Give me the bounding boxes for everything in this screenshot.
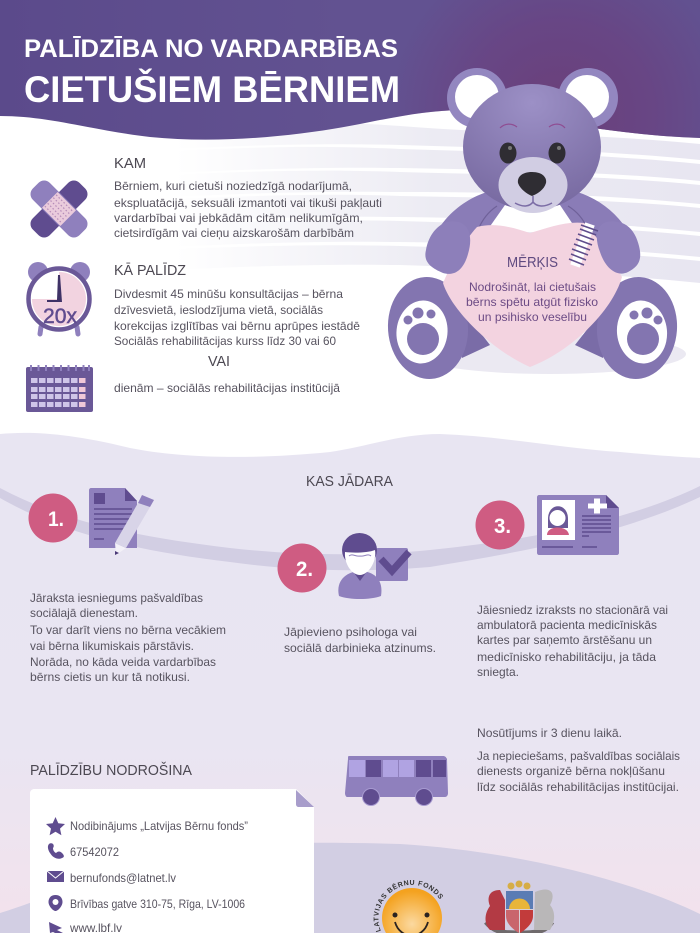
goal text on heart: bērns spētu atgūt fizisko (466, 295, 598, 309)
block: KĀ PALĪDZ: VAI (208, 354, 230, 370)
step 3 text: kartes par saņemto ārstēšanu un (477, 633, 652, 647)
heart (443, 223, 622, 367)
block: KAM (114, 156, 382, 240)
block: KAM: KAM (114, 156, 146, 172)
bear legs (385, 274, 680, 382)
icon: document and pencil (89, 488, 154, 555)
step 3 text: Jāiesniedz izraksts no stacionārā vai (477, 603, 668, 617)
teddy bear (385, 68, 686, 382)
step 1 text: sociālajā dienestam. (30, 606, 138, 620)
step 3 badge (476, 500, 524, 550)
bear ears (447, 68, 618, 128)
shield (506, 891, 533, 933)
step 3 text: medicīnisko rehabilitāciju, ja tāda (477, 650, 656, 664)
icon: specialist with checkmark (338, 533, 409, 599)
step 3 text: ambulatorā pacienta medicīniskās (477, 618, 657, 632)
bear eyes (500, 142, 566, 164)
step 2 badge: 2. (296, 558, 313, 581)
bear paws (425, 221, 640, 274)
step 1 text: vai bērna likumiskais pārstāvis. (30, 639, 194, 653)
step 1 text: bērns cietis un kur tā notikusi. (30, 670, 190, 684)
bear shadow (414, 334, 686, 374)
transport text: Ja nepieciešams, pašvaldības sociālais (477, 749, 680, 763)
step 1 text (30, 591, 226, 684)
block: KAM: ekspluatācijā, seksuāli izmantoti vai tikuši pakļauti (114, 196, 382, 210)
icon: alarm clock 20x (28, 262, 90, 334)
wavy background stripes (150, 122, 700, 283)
goal text on heart: Nodrošināt, lai cietušais (469, 280, 596, 294)
bear nose (518, 172, 546, 196)
bear muzzle (498, 157, 568, 213)
transport text: dienests organizē bērna nokļūšanu (477, 764, 665, 778)
step 3 text (477, 603, 668, 679)
lower lavender section (0, 433, 700, 933)
stars (508, 880, 530, 890)
transport text: līdz sociālās rehabilitācijas institūcijai. (477, 780, 679, 794)
block: KAM: vardarbībai vai jebkādām citām nelikumīgām, (114, 211, 363, 225)
goal text on heart (466, 254, 598, 324)
transport text: Nosūtījums ir 3 dienu laikā. (477, 726, 622, 740)
bear arms and chest (427, 188, 638, 262)
contact card (30, 789, 314, 933)
icon: alarm clock 20x: 20x (43, 305, 78, 328)
contact: phone (48, 843, 119, 859)
header banner (0, 0, 700, 140)
step 2 text: Jāpievieno psihologa vai (284, 625, 417, 639)
heading: PALĪDZĪBU NODROŠINA: PALĪDZĪBU NODROŠINA (30, 762, 192, 779)
stitches (569, 224, 598, 266)
title: PALĪDZĪBA NO VARDARBĪBAS (24, 35, 398, 63)
contact: email: bernufonds@latnet.lv (70, 871, 176, 885)
bear head (463, 84, 601, 210)
contact: website (49, 921, 122, 933)
title: CIETUŠIEM BĒRNIEM (24, 68, 400, 110)
step 1 text: To var darīt viens no bērna vecākiem (30, 623, 226, 637)
lion (486, 890, 505, 930)
block: KĀ PALĪDZ: dienām – sociālās rehabilitācijas institūcijā (114, 381, 340, 395)
step 1 text: Norāda, no kāda veida vardarbības (30, 655, 216, 669)
step 2 text: sociālā darbinieka atzinums. (284, 641, 436, 655)
step 1 badge (28, 494, 78, 542)
step 2 text (284, 625, 436, 655)
block: KĀ PALĪDZ: Divdesmit 45 minūšu konsultācijas – bērna (114, 287, 343, 301)
griffin (534, 890, 554, 930)
block: KĀ PALĪDZ: dzīvesvietā, ieslodzījuma vietā, sociālās (114, 303, 323, 317)
icon: crossed bandages (27, 177, 91, 241)
step 1 badge: 1. (48, 508, 64, 531)
wreath (486, 922, 552, 933)
step 2 badge (278, 544, 326, 592)
logo: Latvian coat of arms (486, 880, 554, 933)
goal text on heart: MĒRĶIS (507, 254, 558, 271)
icon: calendar (26, 365, 93, 412)
block: KĀ PALĪDZ: Sociālās rehabilitācijas kurss līdz 30 vai 60 (114, 334, 336, 348)
block: KĀ PALĪDZ (114, 263, 360, 395)
block: KAM: cietsirdīgām vai cieņu aizskarošām darbībām (114, 226, 354, 240)
step 1 text: Jāraksta iesniegums pašvaldības (30, 591, 203, 605)
heading: KAS JĀDARA: KAS JĀDARA (306, 474, 393, 490)
block: KĀ PALĪDZ: korekcijas izglītības vai bērnu aprūpes iestādē (114, 319, 360, 333)
contact: organisation: Nodibinājums „Latvijas Bērnu fonds” (70, 819, 248, 833)
logo: Latvijas Bērnu fonds sun: LATVIJAS BĒRNU FONDS (374, 880, 443, 932)
block: KĀ PALĪDZ: KĀ PALĪDZ (114, 263, 186, 279)
ribbon path connecting steps (0, 486, 700, 570)
bear brows (500, 124, 565, 128)
contact: organisation (46, 817, 248, 835)
icon: bus (345, 756, 448, 806)
step 3 badge: 3. (494, 515, 511, 538)
transport text (477, 726, 680, 794)
icon: medical card (537, 495, 619, 555)
block: KAM: Bērniem, kuri cietuši noziedzīgā nodarījumā, (114, 179, 352, 193)
contact: phone: 67542072 (70, 845, 119, 859)
step 3 text: sniegta. (477, 665, 519, 679)
bottom hill (0, 843, 700, 933)
title (24, 35, 400, 110)
contact: address: Brīvības gatve 310-75, Rīga, LV-1006 (70, 897, 245, 911)
goal text on heart: un psihisko veselību (478, 310, 587, 324)
